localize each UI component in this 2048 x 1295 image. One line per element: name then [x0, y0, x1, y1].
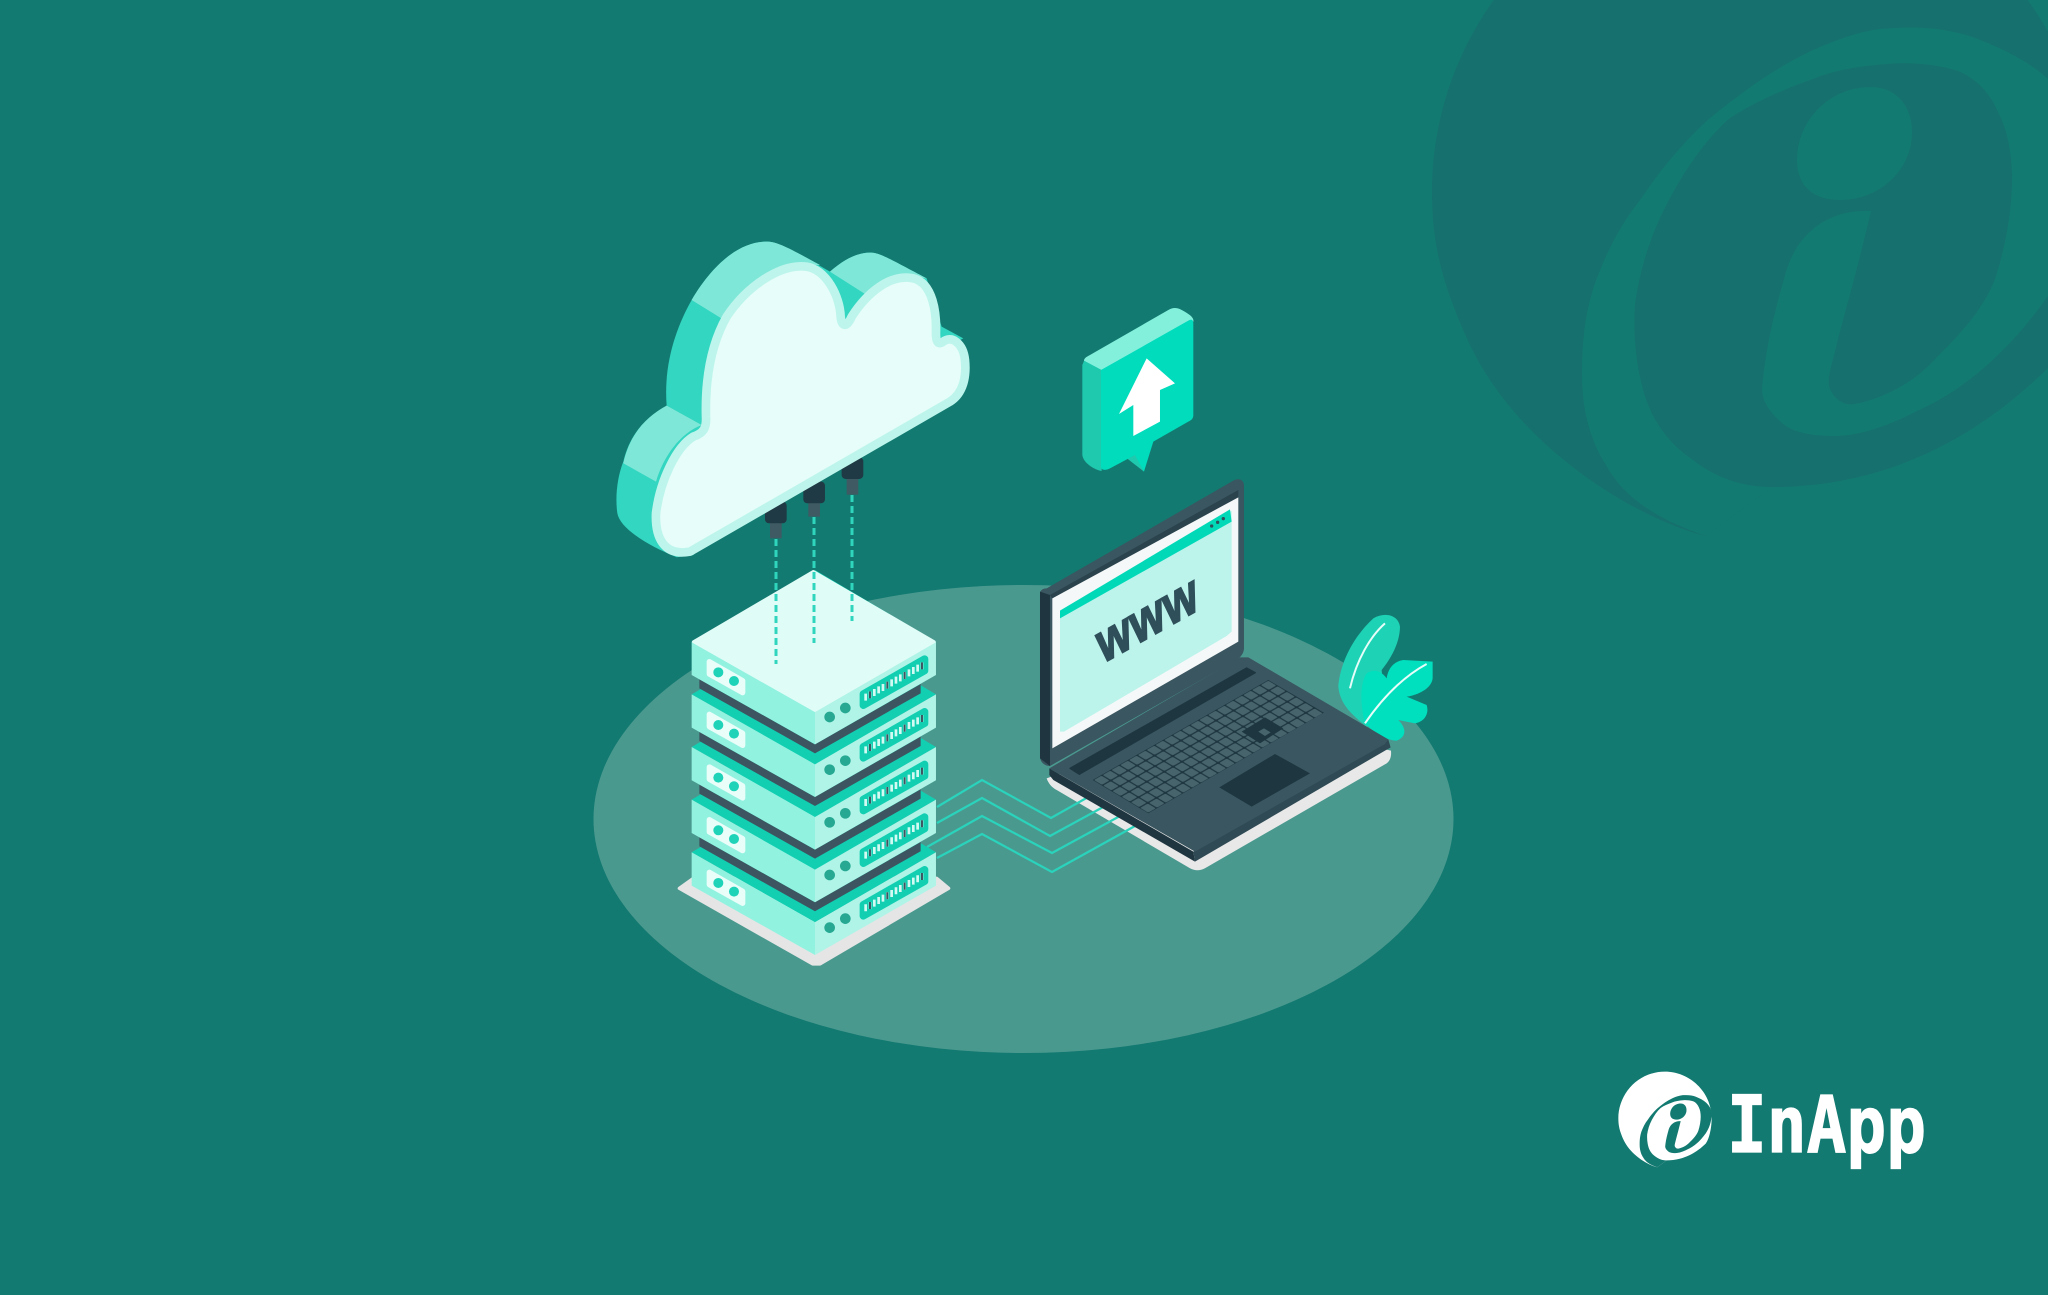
arrow up	[1119, 358, 1175, 436]
spacer 4	[699, 837, 921, 911]
server unit 5	[692, 781, 936, 955]
laptop front-right rim	[1193, 739, 1391, 862]
screen display	[1060, 511, 1232, 732]
screen white frame	[1052, 497, 1238, 748]
laptop base plate	[1047, 713, 1391, 870]
trackpad	[1219, 754, 1310, 807]
spacer 1	[699, 679, 921, 753]
keyboard keys	[1093, 680, 1324, 813]
server unit 3	[692, 675, 936, 850]
spacer 2	[699, 732, 921, 806]
dashed data lines	[776, 495, 852, 664]
logo wordmark: InApp	[1727, 1081, 1926, 1171]
cloud face	[656, 266, 965, 552]
bubble side	[1082, 358, 1102, 471]
server top face	[693, 571, 934, 711]
laptop deck	[1049, 657, 1388, 852]
cloud lobe highlight: right	[830, 253, 927, 295]
laptop	[1040, 479, 1391, 862]
server unit 4	[692, 728, 936, 902]
plug 3	[842, 457, 863, 495]
bubble tail back	[1126, 447, 1144, 472]
front leaf	[1361, 660, 1433, 741]
cloud lobe highlight: main	[692, 242, 820, 322]
cloud lobe highlight: lower	[623, 406, 702, 482]
lid top dark edge	[1050, 490, 1238, 598]
watermark: InApp logo mark	[1432, 0, 2048, 536]
laptop lid	[1040, 479, 1244, 766]
base plate	[679, 878, 949, 964]
www text: www	[1090, 559, 1204, 676]
plug 2	[803, 482, 825, 517]
leaf veins	[1350, 623, 1427, 723]
server unit 2	[692, 623, 936, 797]
icon: leaves	[1338, 615, 1433, 741]
back leaf	[1338, 615, 1400, 727]
ground ellipse	[594, 585, 1454, 1053]
speaker strip	[1070, 668, 1255, 774]
spacer 3	[699, 785, 921, 859]
lid side edge	[1040, 592, 1050, 766]
arrow key gap	[1242, 717, 1283, 743]
browser dots	[1210, 517, 1225, 528]
cloud connectors	[765, 457, 863, 538]
server unit 1	[692, 570, 936, 744]
icon: cloud	[616, 242, 965, 557]
arrow key	[1258, 728, 1271, 736]
browser title bar	[1060, 509, 1232, 618]
logo: InApp	[1618, 1072, 1926, 1171]
keyboard well	[1093, 680, 1324, 813]
server rack	[679, 570, 949, 964]
laptop front-left rim	[1049, 768, 1195, 862]
bubble top	[1084, 308, 1193, 370]
cloud side extrusion	[616, 242, 963, 557]
icon: upload speech bubble	[1082, 308, 1193, 472]
bubble front	[1101, 320, 1193, 472]
plug 1	[765, 502, 787, 538]
network wires	[927, 780, 1135, 872]
logo mark	[1618, 1072, 1712, 1167]
